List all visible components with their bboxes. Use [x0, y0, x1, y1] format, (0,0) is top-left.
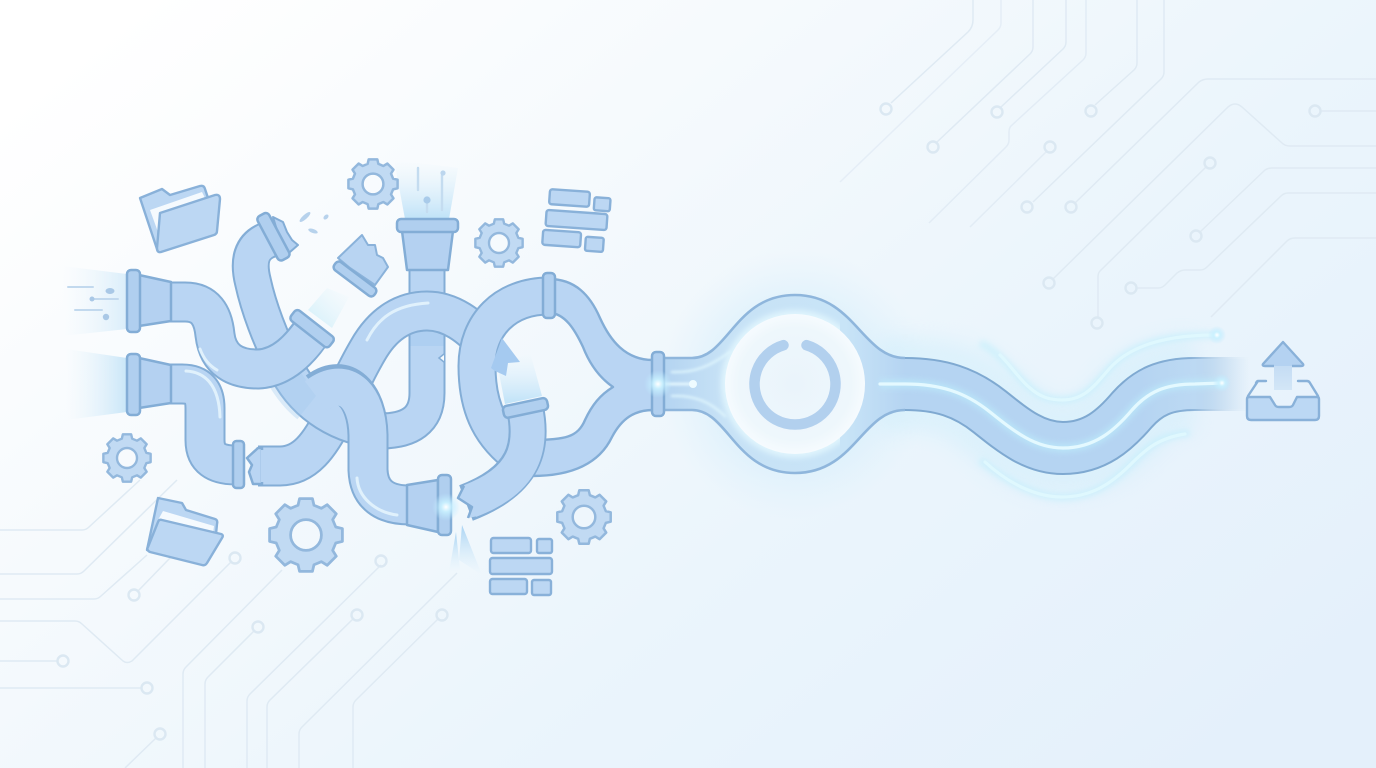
taper: knot end	[407, 480, 438, 532]
flow streak: upper	[980, 335, 1215, 400]
pipe: ring	[477, 296, 549, 458]
icon: gear left	[103, 434, 151, 482]
icon: folder top	[140, 186, 220, 252]
flow streak: lower	[980, 433, 1190, 497]
flange: top input	[127, 270, 140, 332]
icon: folder bottom	[147, 498, 223, 565]
bulb: inner white disc	[721, 310, 869, 458]
flange: second input	[127, 354, 140, 415]
flange: ring top	[543, 273, 555, 318]
pipe: second input	[169, 371, 236, 465]
arrow	[1263, 342, 1303, 390]
flow streak: central	[880, 383, 1222, 448]
pipe: knot S-curve	[316, 385, 410, 515]
flange	[502, 397, 549, 418]
spray: inside ring	[498, 352, 542, 404]
broken end	[247, 448, 262, 484]
spray: bottom leak	[449, 525, 482, 575]
glow: outgoing wave	[880, 384, 1195, 448]
spray: top funnel	[394, 160, 458, 219]
broken pipe fragment	[332, 235, 388, 298]
flow streaks: pipe interior left	[664, 352, 730, 416]
broken edge: top flange teeth	[273, 217, 298, 257]
taper: top input	[139, 275, 171, 326]
pipe: vertical from funnel	[380, 268, 444, 431]
pipe: top input S-curve	[169, 302, 316, 370]
pipe: right forked merge	[532, 279, 653, 476]
icon: data blocks bottom	[490, 538, 552, 595]
icon: power ring	[754, 345, 836, 425]
circuit traces: bottom left	[0, 480, 457, 768]
icon: output tray with up arrow	[1247, 342, 1319, 420]
taper: second input	[139, 358, 171, 408]
flow endpoints	[1208, 326, 1231, 392]
input stream glow: bottom	[66, 349, 127, 420]
icon: data blocks top	[542, 189, 611, 252]
glow: around processing ring	[660, 249, 930, 519]
flange: top broken	[256, 212, 291, 262]
icon: gear middle	[475, 219, 523, 267]
funnel: top	[397, 219, 458, 270]
input stream glow: top	[62, 266, 127, 336]
outgoing pipe: wave	[880, 384, 1252, 448]
outgoing pipe: bulb housing	[664, 295, 905, 473]
broken shard: inside ring	[491, 338, 520, 376]
spray: broken joint upper	[308, 288, 349, 328]
flange: merge with glow	[644, 352, 672, 416]
circuit traces: top right	[840, 0, 1376, 328]
flange: top S-curve end	[289, 308, 335, 349]
debris	[298, 211, 330, 235]
pipe: broken downpipe	[458, 397, 549, 518]
tray	[1248, 381, 1318, 396]
flange: knot end with leak glow	[432, 475, 460, 535]
flange: second input end	[233, 441, 244, 488]
icon: gear top	[348, 159, 398, 209]
pipe: from broken top flange	[251, 238, 385, 431]
arch highlight	[367, 303, 428, 340]
icon: gear large	[270, 499, 342, 571]
pipe crack notch	[439, 354, 444, 362]
icon: gear bottom right	[557, 490, 611, 544]
pipe: arch with broken lower end	[247, 303, 490, 484]
